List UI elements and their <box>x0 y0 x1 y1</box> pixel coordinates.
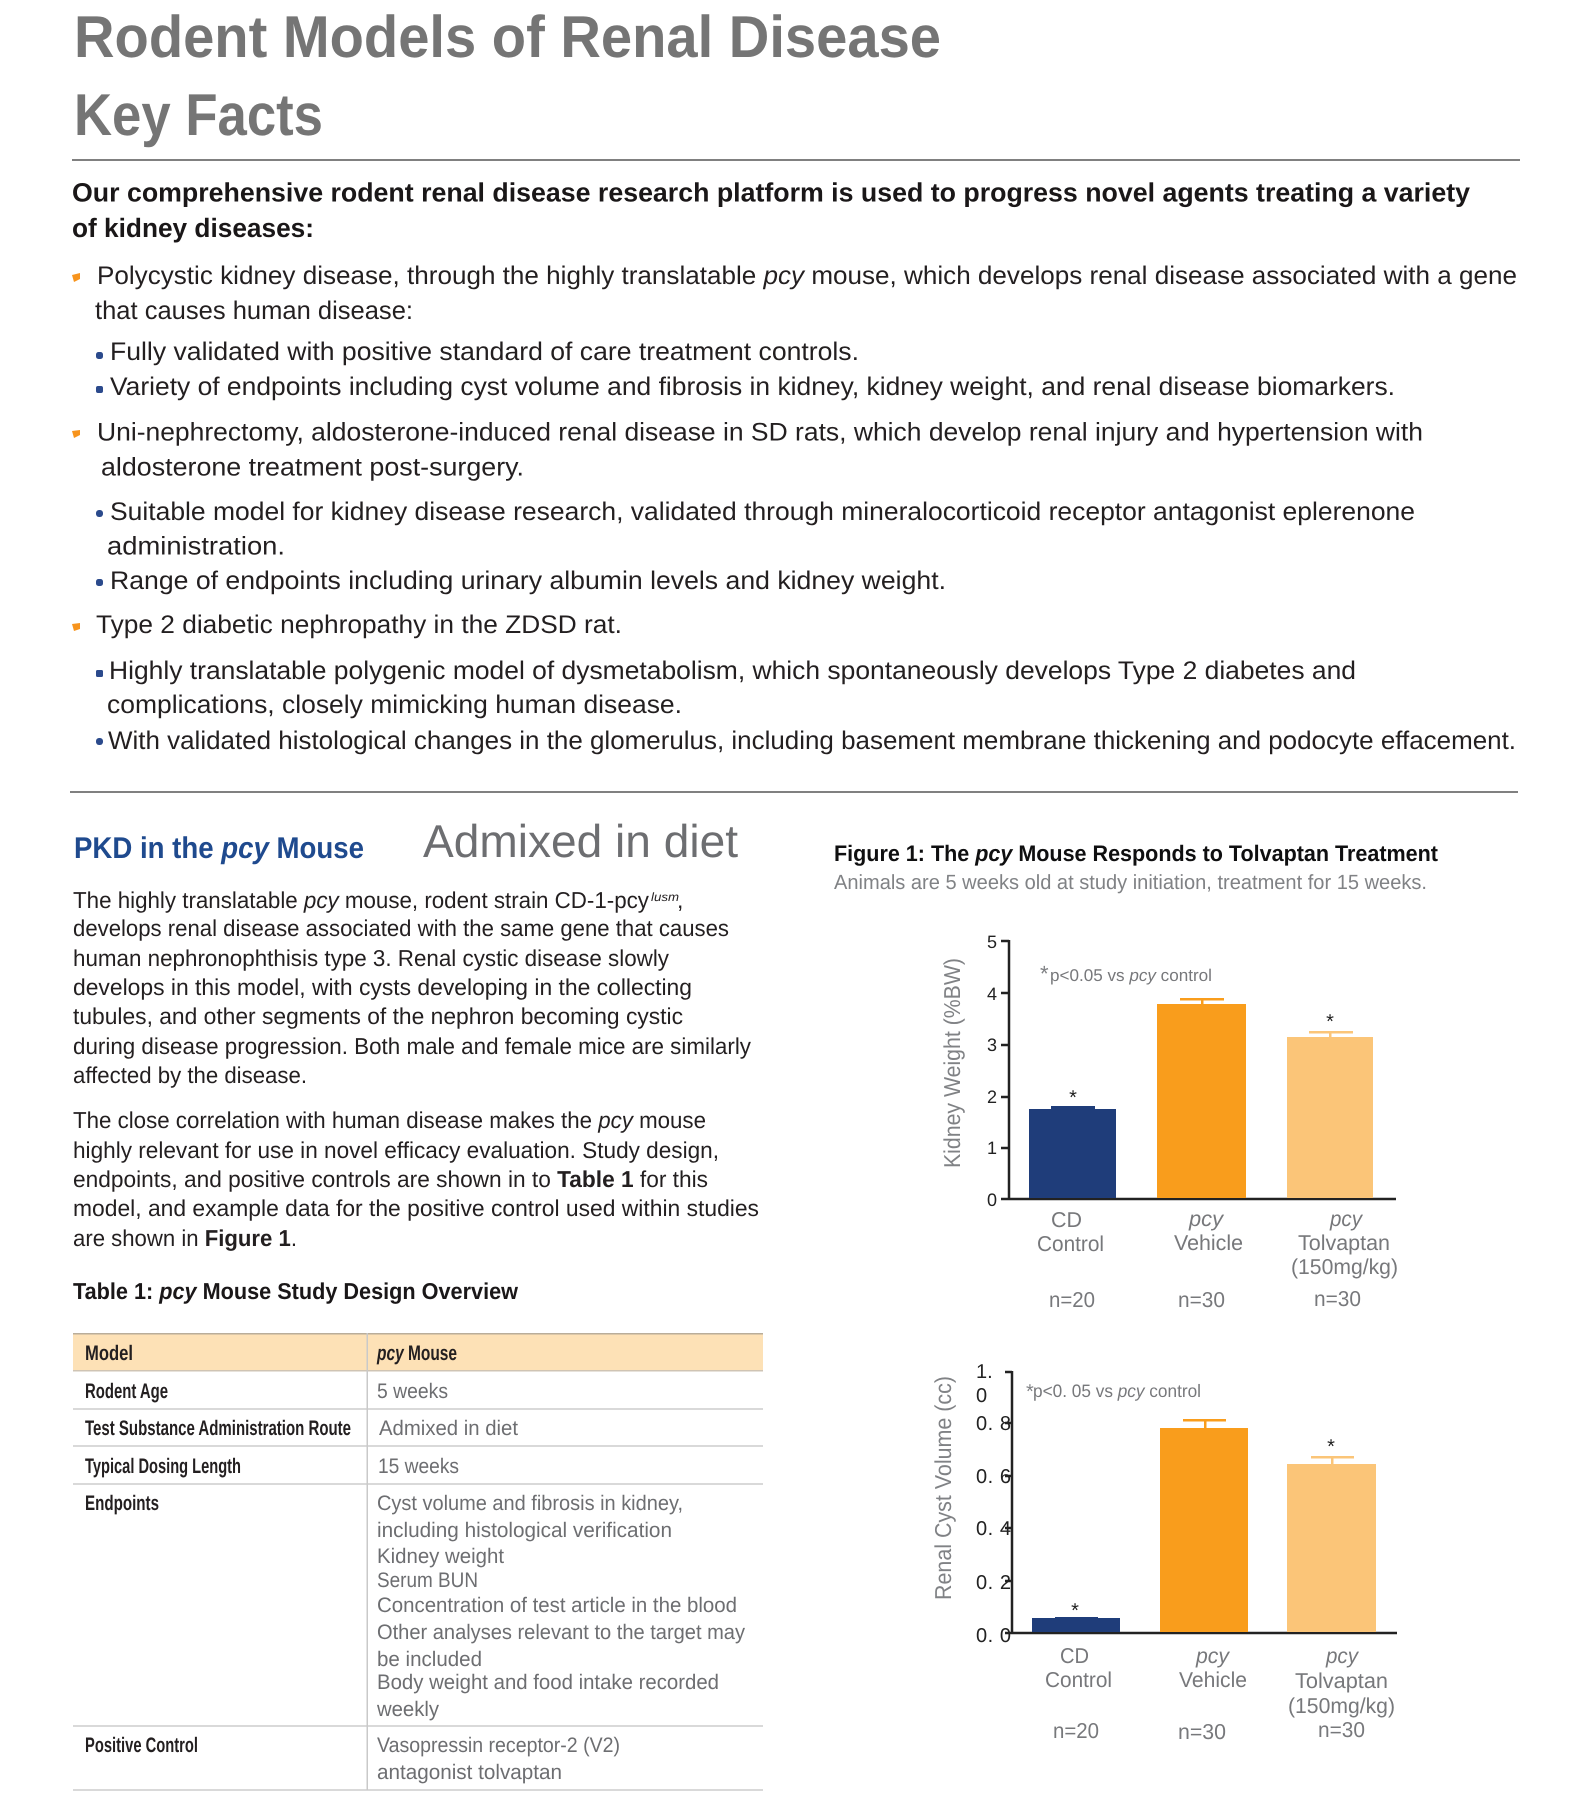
chart: kidney weight bar chart <box>939 932 1398 1312</box>
text block: paragraph 1: develops renal disease associated with the same gene that causes <box>73 915 729 941</box>
x axis labels: n=20 <box>1053 1719 1099 1743</box>
row labels: Positive Control <box>85 1734 198 1757</box>
x axis labels: pcy <box>1329 1207 1363 1231</box>
text: uni-nephrectomy: Uni-nephrectomy, aldosterone-induced renal disease in SD rats, which develop renal injury and hypertension with <box>97 418 1423 446</box>
row values: 15 weeks <box>378 1455 459 1478</box>
icon: orange bullet uni-nephrectomy <box>72 430 80 438</box>
x axis labels: Control <box>1037 1232 1104 1256</box>
icon: orange bullet polycystic <box>72 273 80 282</box>
text: highly translatable polygenic: Highly translatable polygenic model of dysmetabolism, which spontaneously develops Type 2 diabetes and <box>109 657 1356 685</box>
text block: paragraph 1: tubules, and other segments of the nephron becoming cystic <box>73 1003 683 1029</box>
bar: pcy tolvaptan <box>1287 1011 1373 1198</box>
x axis labels: n=20 <box>1049 1288 1095 1312</box>
row values <box>376 1380 745 1784</box>
significance note: p<0. 05 vs pcy control <box>1033 1381 1201 1401</box>
text: uni-nephrectomy: aldosterone treatment post-surgery. <box>101 454 524 482</box>
text block: paragraph 1: lusm <box>651 890 679 904</box>
icon: orange bullet type 2 <box>72 623 80 631</box>
x axis labels: n=30 <box>1178 1720 1226 1744</box>
text block: paragraph 2: model, and example data for the positive control used within studies <box>73 1195 759 1221</box>
y axis labels <box>987 932 997 1210</box>
text block: paragraph 1: human nephronophthisis type 3. Renal cystic disease slowly <box>73 945 669 971</box>
title: Rodent Models of Renal Disease <box>74 4 941 70</box>
table: pcy mouse study design overview <box>73 1333 763 1791</box>
text block: paragraph 1: The highly translatable pcy mouse, rodent strain CD-1-pcy <box>73 887 649 913</box>
y axis with ticks <box>1001 940 1396 1200</box>
bar: CD control <box>1029 1087 1116 1198</box>
y axis labels: 1. <box>976 1361 993 1383</box>
panel: key facts summary <box>72 178 1517 755</box>
x axis labels: Tolvaptan <box>1298 1231 1390 1255</box>
x axis labels: (150mg/kg) <box>1288 1694 1395 1718</box>
row values: including histological verification <box>377 1519 672 1542</box>
y axis labels: 1 <box>987 1138 997 1158</box>
x axis labels: CD <box>1051 1208 1082 1232</box>
x axis labels: Tolvaptan <box>1295 1669 1388 1693</box>
y axis labels: 0. 4 <box>976 1518 1011 1540</box>
row values: Other analyses relevant to the target may <box>377 1621 745 1644</box>
table header row: Model <box>85 1342 133 1365</box>
x axis labels: pcy <box>1195 1644 1230 1668</box>
lead paragraph heading: Our comprehensive rodent renal disease research platform is used to progress novel agents treating a variety <box>72 178 1470 208</box>
y axis labels: 0 <box>976 1385 987 1407</box>
x axis labels: n=30 <box>1178 1288 1225 1312</box>
text block: paragraph 2: are shown in Figure 1. <box>73 1225 297 1251</box>
text: uni-nephrectomy <box>97 418 1423 482</box>
heading: figure 1: Figure 1: The pcy Mouse Responds to Tolvaptan Treatment <box>834 841 1438 866</box>
text: highly translatable polygenic <box>107 657 1356 719</box>
lead paragraph heading <box>72 178 1470 243</box>
text: polycystic kidney disease: Polycystic kidney disease, through the highly translatable pcy mouse, which develops renal disease associated with a gene <box>97 262 1517 290</box>
icon: blue bullet 4 <box>96 579 103 586</box>
text: suitable model: administration. <box>107 532 285 560</box>
y axis labels: 0 <box>987 1190 997 1210</box>
panel: PKD in the pcy mouse <box>73 815 763 1791</box>
text block: paragraph 2 <box>73 1107 759 1251</box>
x axis labels: pcy <box>1325 1644 1359 1668</box>
row values: Admixed in diet <box>379 1417 518 1440</box>
row values: Vasopressin receptor-2 (V2) <box>377 1734 620 1757</box>
bar: CD control: * <box>1069 1087 1077 1109</box>
bar: CD control <box>1032 1600 1120 1632</box>
panel: figure 1 <box>834 841 1438 1744</box>
row labels: Typical Dosing Length <box>85 1455 241 1478</box>
y axis title: Renal Cyst Volume (cc) <box>930 1376 956 1600</box>
y axis labels: 3 <box>987 1035 997 1055</box>
bar: pcy vehicle <box>1157 998 1246 1198</box>
text: range of endpoints: Range of endpoints including urinary albumin levels and kidney weight. <box>110 567 946 595</box>
row values: Cyst volume and fibrosis in kidney, <box>377 1492 683 1515</box>
text block: paragraph 1: , <box>677 887 683 913</box>
row values: be included <box>377 1648 482 1671</box>
table header row <box>73 1333 763 1372</box>
y axis labels: 0. 2 <box>976 1572 1011 1594</box>
text: suitable model: Suitable model for kidney disease research, validated through mineralocorticoid receptor antagonist eplerenone <box>110 498 1415 526</box>
icon: blue bullet 3 <box>96 510 103 517</box>
bar: pcy vehicle <box>1160 1419 1248 1632</box>
text: polycystic kidney disease: that causes human disease: <box>95 297 413 325</box>
y axis labels: 0. 6 <box>976 1466 1011 1488</box>
x axis labels: n=30 <box>1318 1718 1365 1742</box>
text: validated histological changes: With validated histological changes in the glomerulus, including basement membrane thickening and podocyte effacement. <box>108 727 1516 755</box>
significance note: * <box>1040 961 1049 986</box>
y axis labels: 5 <box>987 932 997 952</box>
y axis labels: 4 <box>987 984 997 1004</box>
text block: paragraph 1: affected by the disease. <box>73 1062 307 1088</box>
chart: renal cyst volume bar chart <box>930 1361 1397 1744</box>
x axis labels <box>1045 1644 1395 1744</box>
text: highly translatable polygenic: complications, closely mimicking human disease. <box>107 691 682 719</box>
significance note: p<0.05 vs pcy control <box>1050 966 1212 985</box>
y axis labels: 2 <box>987 1087 997 1107</box>
x axis labels: Control <box>1045 1668 1112 1692</box>
bar: pcy tolvaptan: * <box>1326 1011 1334 1033</box>
x axis labels: CD <box>1060 1644 1089 1668</box>
text: fully validated: Fully validated with positive standard of care treatment controls. <box>110 338 859 366</box>
bar: pcy tolvaptan <box>1287 1436 1376 1632</box>
row labels <box>85 1380 351 1757</box>
row values: Body weight and food intake recorded <box>377 1671 719 1694</box>
row values: Kidney weight <box>377 1545 504 1568</box>
heading: PKD in the pcy Mouse: PKD in the pcy Mouse <box>74 832 364 865</box>
y axis labels <box>976 1361 1011 1647</box>
text: type 2 diabetic nephropathy: Type 2 diabetic nephropathy in the ZDSD rat. <box>96 611 622 639</box>
title <box>74 4 941 148</box>
table header row: pcy Mouse <box>376 1342 457 1365</box>
row values: 5 weeks <box>377 1380 448 1403</box>
icon: blue bullet 5 <box>96 670 103 677</box>
x axis labels: pcy <box>1188 1207 1224 1231</box>
text: suitable model <box>107 498 1415 560</box>
significance note: * <box>1026 1381 1034 1403</box>
y axis labels: 0. 0 <box>976 1625 1011 1647</box>
overlay text: Admixed in diet: Admixed in diet <box>423 815 738 867</box>
text block: paragraph 1: develops in this model, with cysts developing in the collecting <box>73 974 692 1000</box>
title: Key Facts <box>74 82 323 148</box>
row values: Serum BUN <box>377 1569 478 1592</box>
row labels: Rodent Age <box>85 1380 168 1403</box>
y axis with ticks <box>1005 1371 1397 1634</box>
x axis labels <box>1037 1207 1398 1312</box>
row values: weekly <box>376 1698 439 1721</box>
text block: paragraph 2: The close correlation with human disease makes the pcy mouse <box>73 1107 706 1133</box>
icon: blue bullet 1 <box>96 352 103 359</box>
text: variety of endpoints: Variety of endpoints including cyst volume and fibrosis in kidney, kidney weight, and renal disease biomarkers. <box>110 373 1395 401</box>
y axis labels: 0. 8 <box>976 1413 1011 1435</box>
row values: Concentration of test article in the blood <box>377 1594 737 1617</box>
icon: blue bullet 6 <box>96 738 103 745</box>
icon: blue bullet 2 <box>96 386 103 393</box>
text block: paragraph 2: highly relevant for use in novel efficacy evaluation. Study design, <box>73 1137 719 1163</box>
x axis labels: Vehicle <box>1174 1231 1243 1255</box>
bar: pcy tolvaptan: * <box>1327 1436 1335 1458</box>
x axis labels: n=30 <box>1314 1287 1361 1311</box>
text block: paragraph 1 <box>73 887 751 1088</box>
text block: paragraph 2: endpoints, and positive controls are shown in to Table 1 for this <box>73 1166 708 1192</box>
row values: antagonist tolvaptan <box>377 1761 562 1784</box>
row labels: Endpoints <box>85 1492 159 1515</box>
x axis labels: Vehicle <box>1179 1668 1247 1692</box>
heading: table 1: Table 1: pcy Mouse Study Design Overview <box>73 1278 518 1304</box>
row labels: Test Substance Administration Route <box>85 1417 351 1440</box>
y axis title: Kidney Weight (%BW) <box>939 958 965 1168</box>
bar: CD control: * <box>1071 1600 1079 1622</box>
text: polycystic kidney disease <box>95 262 1517 325</box>
figure subtitle: Animals are 5 weeks old at study initiation, treatment for 15 weeks. <box>834 871 1427 894</box>
x axis labels: (150mg/kg) <box>1291 1255 1398 1279</box>
lead paragraph heading: of kidney diseases: <box>72 213 314 243</box>
text block: paragraph 1: during disease progression. Both male and female mice are similarly <box>73 1033 751 1059</box>
